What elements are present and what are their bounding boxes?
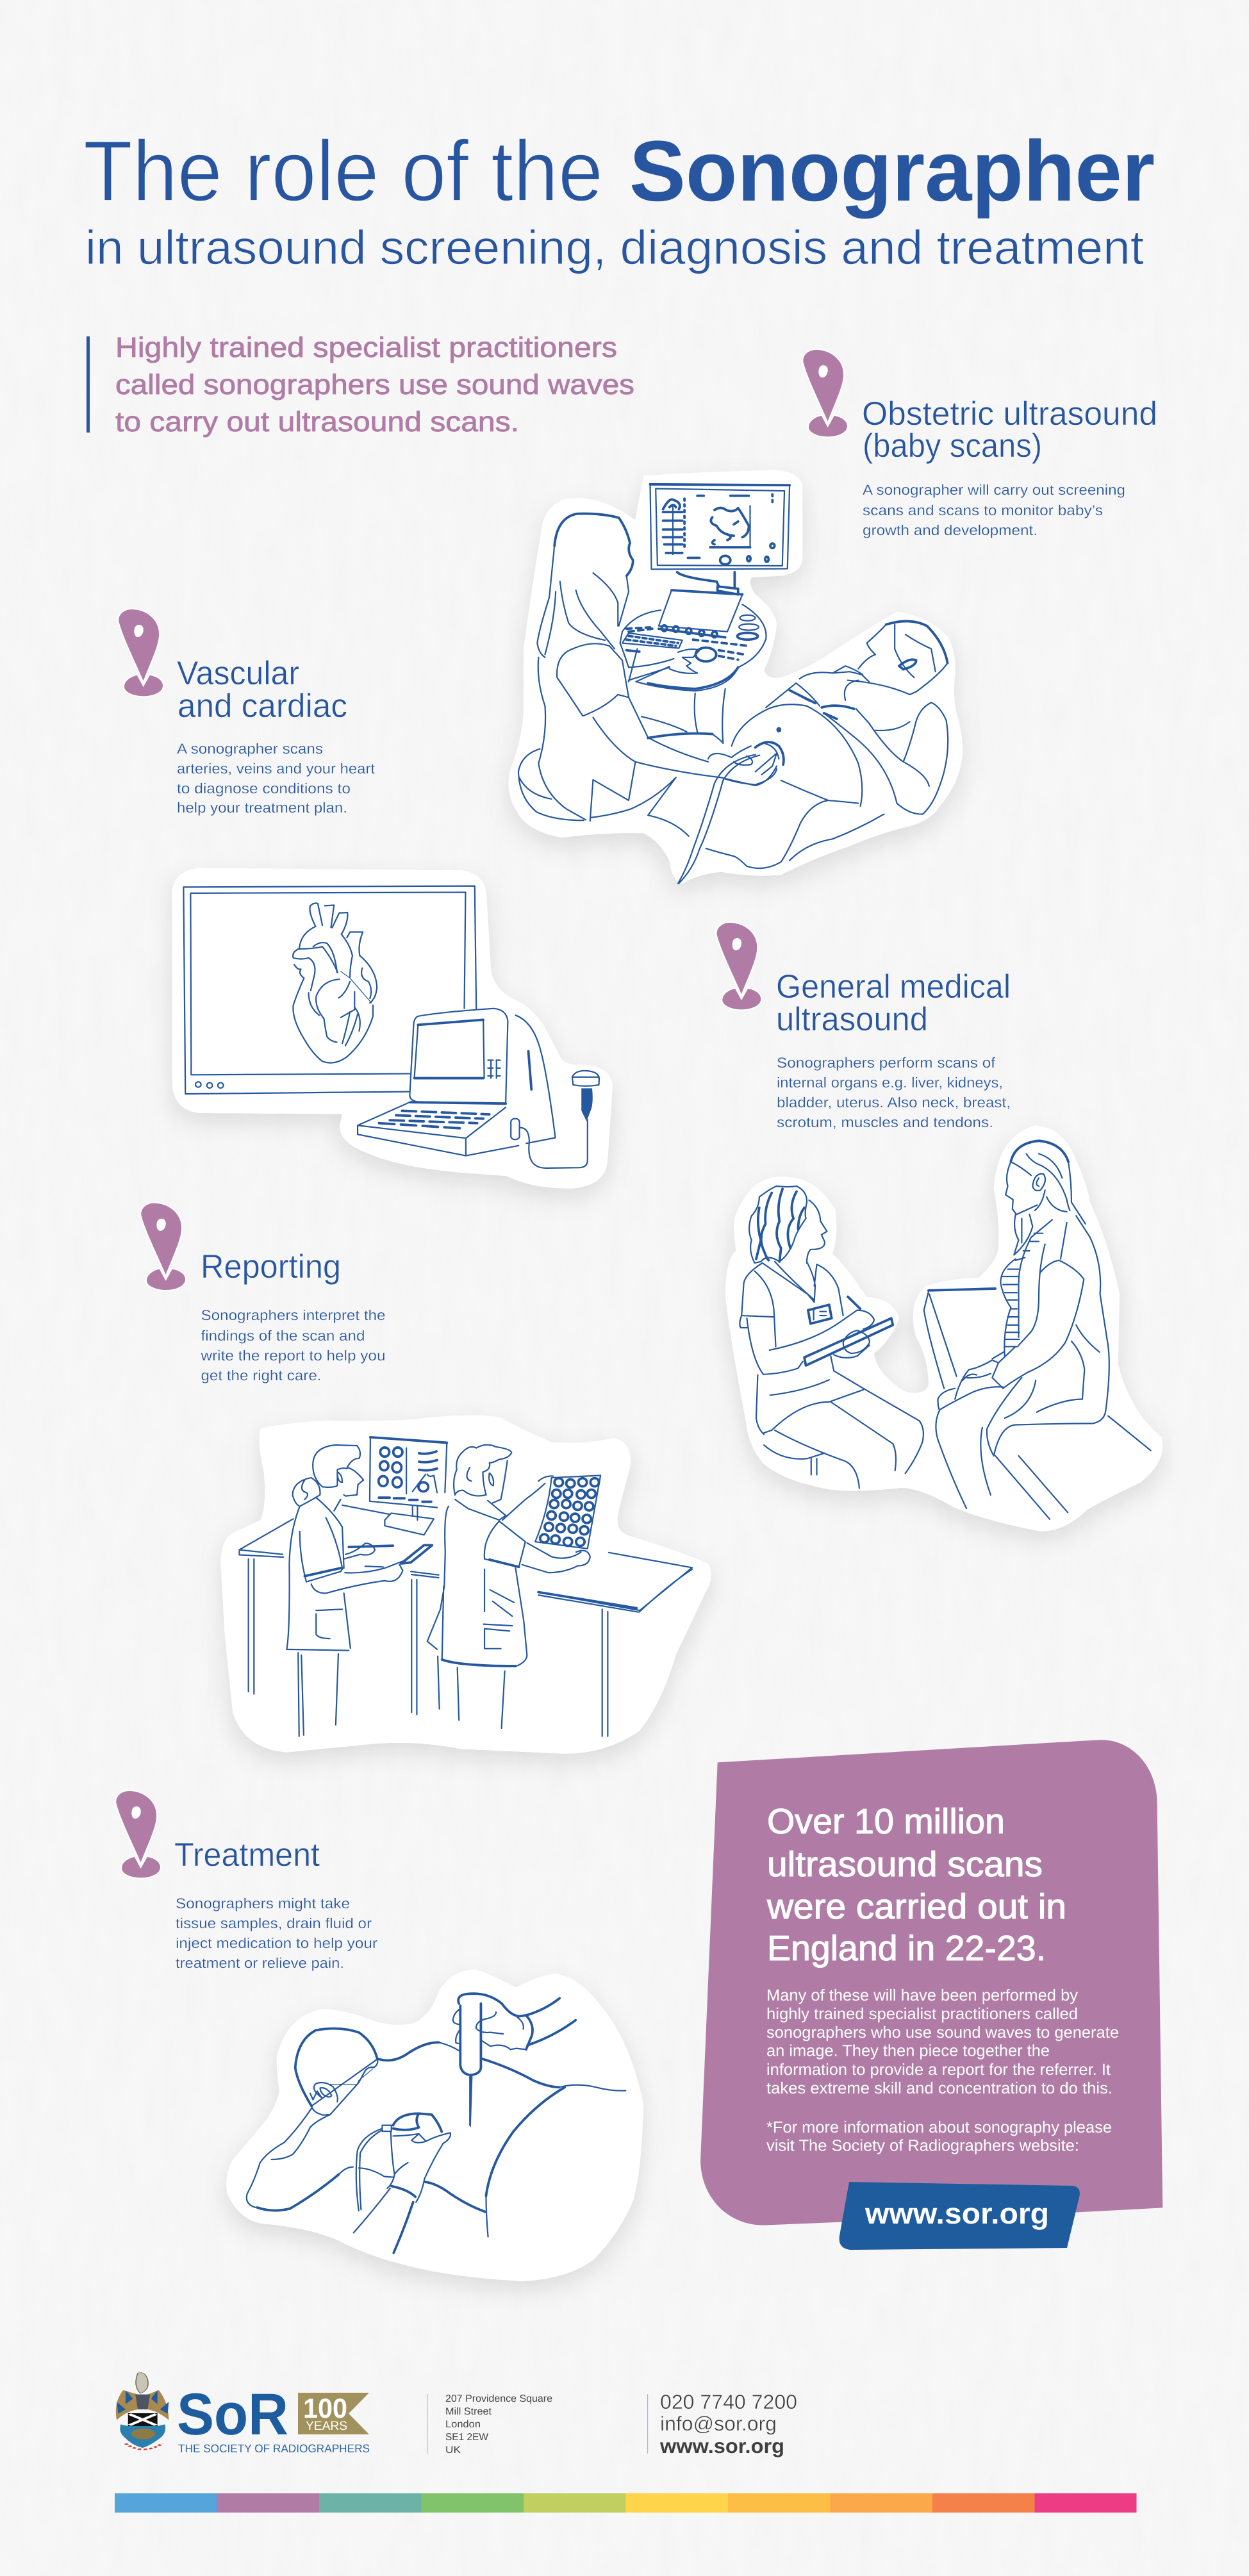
text block: vascular and cardiac: to diagnose conditions to (177, 780, 351, 797)
title (83, 124, 1155, 219)
illustration: heart on monitor with ultrasound machine (172, 868, 613, 1189)
organisation name: THE SOCIETY OF RADIOGRAPHERS (178, 2442, 370, 2455)
callout body text (766, 1986, 1119, 2154)
text block: obstetric ultrasound: growth and development. (863, 522, 1038, 538)
text block: vascular and cardiac (177, 655, 376, 816)
title: The role of the (83, 124, 603, 219)
icon: reporting pin (140, 1203, 186, 1291)
footer address: London (445, 2419, 481, 2430)
icon: treatment pin (115, 1790, 161, 1878)
text block: reporting: findings of the scan and (201, 1328, 365, 1344)
text block: treatment: treatment or relieve pain. (176, 1955, 344, 1971)
sonographer holding scan sheet (427, 1445, 600, 1728)
panel: statistic callout (700, 1740, 1162, 2250)
text block: general medical ultrasound: internal organs e.g. liver, kidneys, (777, 1075, 1003, 1091)
icon: general medical pin (716, 922, 761, 1010)
text block: obstetric ultrasound: scans and scans to monitor baby’s (863, 502, 1103, 518)
desktop monitor (342, 1437, 447, 1535)
intro statement: called sonographers use sound waves (115, 369, 634, 400)
text block: general medical ultrasound (776, 968, 1011, 1130)
text block: obstetric ultrasound (862, 395, 1157, 538)
intro statement: to carry out ultrasound scans. (115, 406, 519, 438)
callout heading: ultrasound scans (767, 1844, 1043, 1884)
colour bar (115, 2493, 1137, 2513)
text block: treatment: tissue samples, drain fluid or (176, 1915, 372, 1931)
callout heading: were carried out in (766, 1887, 1066, 1926)
footer logo (116, 2373, 370, 2455)
footer address: SE1 2EW (445, 2432, 488, 2443)
text block: obstetric ultrasound: A sonographer will carry out screening (863, 482, 1125, 498)
100 years badge: 100 (303, 2393, 347, 2424)
callout body text: information to provide a report for the referrer. It (766, 2061, 1111, 2079)
callout heading (766, 1801, 1066, 1968)
text block: treatment: Sonographers might take (176, 1895, 350, 1911)
text block: reporting: write the report to help you (200, 1348, 386, 1364)
callout body text: sonographers who use sound waves to generate (766, 2024, 1119, 2042)
text block: general medical ultrasound: scrotum, muscles and tendons. (777, 1114, 993, 1130)
intro statement: Highly trained specialist practitioners (115, 332, 617, 363)
sonographer with clipboard (740, 1186, 923, 1488)
patient figure and bed (648, 621, 948, 884)
subtitle: in ultrasound screening, diagnosis and treatment (85, 220, 1144, 274)
callout body text: *For more information about sonography please (766, 2118, 1112, 2136)
text block: general medical ultrasound: ultrasound (776, 1001, 928, 1038)
callout body text: visit The Society of Radiographers website: (766, 2136, 1079, 2154)
text block: reporting: Sonographers interpret the (201, 1307, 386, 1323)
text block: vascular and cardiac: Vascular (177, 655, 299, 692)
second hand with syringe line (354, 2113, 451, 2253)
illustration: two sonographers reporting (220, 1416, 711, 1754)
100 years badge (298, 2393, 369, 2434)
text block: vascular and cardiac: arteries, veins and your heart (177, 761, 376, 777)
patient (247, 2029, 625, 2237)
computer (358, 1009, 599, 1168)
100 years badge: YEARS (306, 2419, 347, 2433)
text block: treatment: Treatment (174, 1837, 320, 1874)
text block: vascular and cardiac: and cardiac (178, 688, 347, 725)
ultrasound monitor (650, 484, 790, 595)
text block: obstetric ultrasound: (baby scans) (863, 427, 1042, 465)
footer contact details (647, 2390, 797, 2457)
text block: reporting (200, 1248, 386, 1383)
footer address: UK (445, 2445, 461, 2456)
text block: general medical ultrasound: General medical (776, 968, 1011, 1005)
text block: reporting: get the right care. (201, 1367, 322, 1383)
illustration: ultrasound-guided injection (226, 1969, 643, 2281)
text block: treatment (174, 1837, 378, 1971)
icon: coat of arms (116, 2373, 169, 2449)
footer contact details: 020 7740 7200 (660, 2390, 797, 2413)
icon: vascular pin (118, 609, 163, 697)
sonographer with tablet (286, 1445, 432, 1737)
text block: treatment: inject medication to help your (176, 1935, 378, 1951)
website button (840, 2182, 1080, 2250)
text block: vascular and cardiac: help your treatment plan. (177, 800, 347, 816)
text block: reporting: Reporting (201, 1248, 341, 1285)
callout body text: takes extreme skill and concentration to do this. (766, 2079, 1113, 2097)
illustration: obstetric scan (509, 470, 963, 884)
console (620, 590, 766, 691)
title: Sonographer (629, 124, 1155, 219)
hand with ultrasound probe and needle (453, 1994, 575, 2127)
text block: general medical ultrasound: bladder, uterus. Also neck, breast, (777, 1094, 1011, 1110)
footer address: 207 Providence Square (445, 2393, 552, 2404)
text block: vascular and cardiac: A sonographer scans (177, 741, 323, 757)
text block: general medical ultrasound: Sonographers perform scans of (777, 1055, 996, 1071)
footer address (427, 2393, 552, 2456)
callout body text: an image. They then piece together the (766, 2042, 1050, 2060)
footer contact details: www.sor.org (659, 2434, 784, 2457)
footer address: Mill Street (445, 2406, 492, 2417)
icon: obstetric pin (802, 349, 848, 437)
sonographer figure (518, 514, 777, 821)
SoR wordmark: SoR (177, 2382, 288, 2447)
website button: www.sor.org (864, 2197, 1049, 2230)
callout heading: Over 10 million (767, 1801, 1005, 1841)
callout heading: England in 22-23. (767, 1928, 1046, 1968)
intro statement (87, 332, 634, 438)
callout body text: Many of these will have been performed by (766, 1986, 1079, 2004)
illustration: sonographer consulting a patient (725, 1125, 1162, 1532)
footer contact details: info@sor.org (660, 2412, 777, 2435)
callout body text: highly trained specialist practitioners called (766, 2005, 1078, 2023)
large monitor (183, 886, 476, 1094)
heart (293, 903, 377, 1063)
desks (239, 1519, 692, 1737)
patient seated (924, 1141, 1151, 1519)
text block: obstetric ultrasound: Obstetric ultrasound (862, 395, 1157, 433)
